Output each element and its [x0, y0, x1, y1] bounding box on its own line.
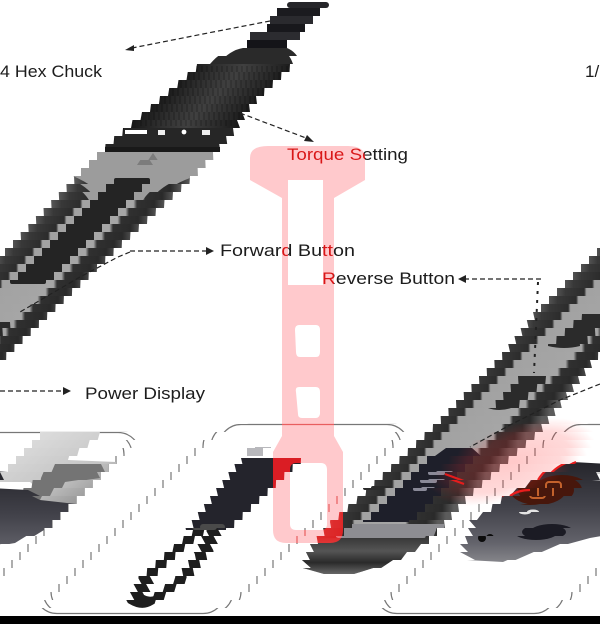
arrow: forward button leader [20, 247, 600, 447]
arrow: reverse button leader [458, 275, 543, 373]
arrow: power display leader [0, 387, 71, 395]
label: reverse button: Reverse Button [322, 269, 455, 288]
red silhouette overlay: tint layer [250, 146, 365, 543]
label: torque setting: Torque Setting [287, 145, 408, 164]
bottom strip [0, 616, 600, 624]
red silhouette overlay: screen layer [250, 146, 365, 543]
label: power display: Power Display [85, 384, 206, 403]
label: 1/4 hex chuck, wrapped start: 1/ [585, 62, 599, 81]
arrow: hex chuck leader [125, 21, 270, 51]
label: forward button: Forward Button [220, 241, 355, 260]
label: 1/4 hex chuck, wrapped end: 4 Hex Chuck [0, 62, 103, 81]
arrow: torque setting leader [240, 113, 314, 142]
